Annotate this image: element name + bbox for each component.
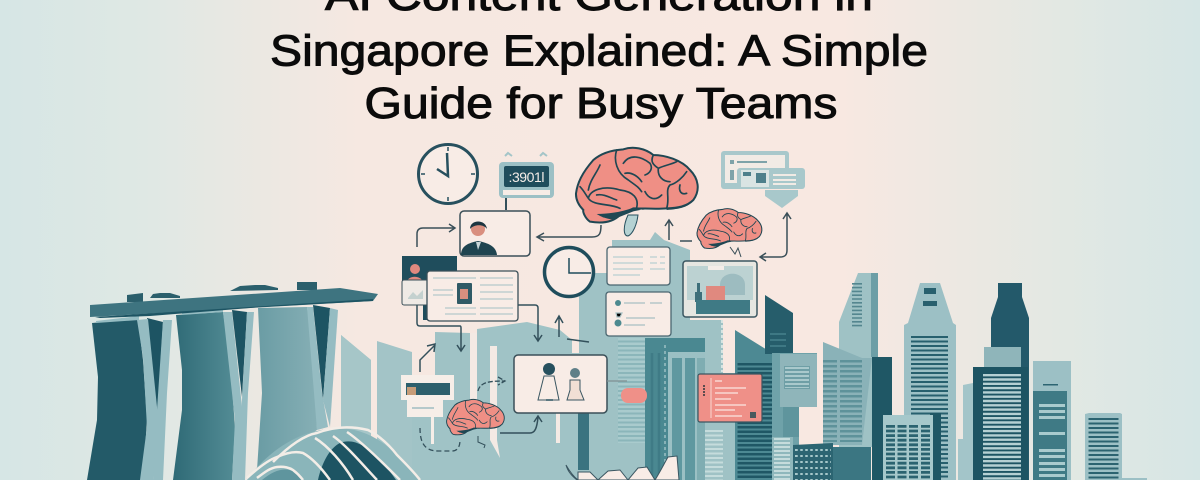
arrow: dashed loop xyxy=(420,428,460,451)
arrow: small up arrow xyxy=(555,316,589,342)
icon: small brain lower xyxy=(447,399,504,448)
icon: digital timer device xyxy=(499,153,554,210)
card: center figures xyxy=(514,355,607,413)
Marina Bay Sands xyxy=(87,282,378,480)
icon: digital timer device: :3901l xyxy=(508,169,544,185)
lotus building xyxy=(566,456,679,480)
card: small image note xyxy=(401,375,454,417)
background city mass xyxy=(341,232,735,480)
panel: top right documents xyxy=(721,151,805,208)
card: chat items xyxy=(606,292,671,336)
card: text list xyxy=(607,247,670,285)
Gardens dome xyxy=(247,427,420,480)
title: Singapore Explained: A Simple xyxy=(270,26,928,76)
clock: center xyxy=(544,248,594,296)
arrow: stack to center card xyxy=(518,305,542,341)
arrow: stack to person card xyxy=(417,224,455,247)
white pillar xyxy=(431,417,434,444)
pink connector blob xyxy=(607,381,647,403)
panel: left card stack xyxy=(402,256,518,321)
title: Guide for Busy Teams xyxy=(364,79,838,128)
right skyline xyxy=(578,273,1147,480)
icon: large brain xyxy=(576,148,698,236)
arrow: note upward xyxy=(420,344,435,372)
card: pink document xyxy=(698,374,762,422)
arrow: brain to center card xyxy=(500,416,542,433)
arrow: brain to person card xyxy=(537,225,601,241)
clock: top left xyxy=(418,144,478,204)
card: person xyxy=(460,211,530,256)
arrow: up xyxy=(665,220,692,241)
icon: small brain upper xyxy=(697,209,762,257)
arrow: documents to photo card xyxy=(760,213,791,261)
arrow: stack to center below xyxy=(417,305,465,351)
arrow: dashed to center card xyxy=(478,377,505,391)
card: photo scene xyxy=(683,261,757,317)
title xyxy=(270,0,928,128)
